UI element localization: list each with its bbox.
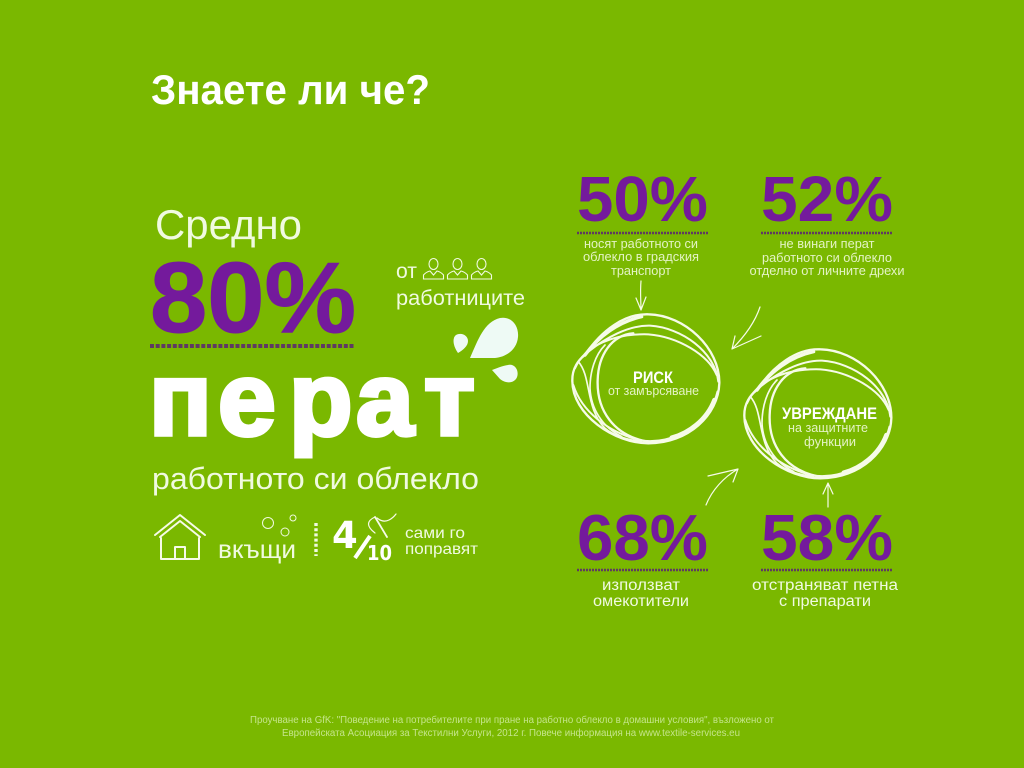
stat: 50%: транспорт	[611, 264, 671, 278]
arrow: 50% to risk	[636, 281, 646, 310]
stat: 50%	[577, 163, 708, 278]
stat: 52%: не винаги перат	[780, 237, 875, 251]
stat: 58%: с препарати	[779, 593, 871, 610]
text: to protective functions: функции	[804, 434, 856, 449]
text: risk: РИСК	[633, 368, 674, 387]
statistic: 4 of 10	[332, 514, 392, 565]
icon: house	[155, 515, 205, 559]
stat: 50%: 50%	[577, 163, 708, 235]
footer source note	[250, 714, 774, 739]
scribble circle	[572, 314, 719, 443]
panel: risk circle	[572, 314, 719, 443]
stat: 50%: облекло в градския	[583, 250, 699, 264]
icon: needle and thread	[368, 514, 396, 537]
title: Знаете ли че?	[151, 66, 430, 113]
stat: 58%	[752, 501, 898, 610]
big number 80%: 80%	[150, 242, 356, 354]
stat: 68%: 68%	[577, 501, 708, 574]
text: of the workers: от	[396, 260, 417, 283]
panel: main statistic	[149, 201, 525, 565]
stat: 52%: работното си облекло	[762, 251, 892, 265]
stat: 68%: омекотители	[593, 593, 689, 610]
text: repair it themselves: поправят	[405, 541, 479, 558]
text: of the workers	[396, 260, 525, 310]
stat: 52%: отделно от личните дрехи	[750, 264, 905, 278]
footer source note: Европейската Асоциация за Текстилни Услуги, 2012 г. Повече информация на www.textile-services.eu	[282, 727, 740, 739]
divider dots	[314, 523, 318, 556]
icon: water drops	[454, 318, 518, 382]
text: of the workers: работниците	[396, 287, 525, 310]
text: their work clothes: работното си облекло	[152, 461, 479, 496]
panel: damage circle	[744, 349, 891, 478]
text: repair it themselves	[405, 525, 479, 558]
stat: 58%: 58%	[761, 501, 893, 574]
text: repair it themselves: сами го	[405, 525, 465, 542]
text: of contamination: от замърсяване	[608, 383, 699, 398]
statistic: 4 of 10: 4	[332, 514, 358, 557]
footer source note: Проучване на GfK: "Поведение на потребителите при пране на работно облекло в домашни условия", възложено от	[250, 714, 774, 726]
scribble circle	[744, 349, 891, 478]
stat: 52%: 52%	[761, 163, 893, 235]
text: average: Средно	[155, 201, 302, 248]
text: damage: УВРЕЖДАНЕ	[782, 404, 877, 423]
text: wash: перат	[149, 342, 475, 458]
text: to protective functions	[788, 420, 868, 449]
arrow: 52% to risk	[732, 307, 761, 349]
stat: 50%: носят работното си	[584, 237, 698, 251]
icon: bubbles	[262, 515, 296, 536]
stat: 68%	[577, 501, 708, 610]
statistic: 4 of 10: 10	[367, 541, 392, 565]
text: to protective functions: на защитните	[788, 420, 868, 435]
text: at home: вкъщи	[218, 534, 296, 564]
stat: 52%	[750, 163, 905, 278]
arrow: 68% to damage	[706, 469, 738, 505]
stat: 68%: използват	[602, 577, 680, 594]
icon: three workers	[424, 258, 492, 279]
arrow: 58% to damage	[823, 483, 833, 507]
stat: 58%: отстраняват петна	[752, 577, 898, 594]
